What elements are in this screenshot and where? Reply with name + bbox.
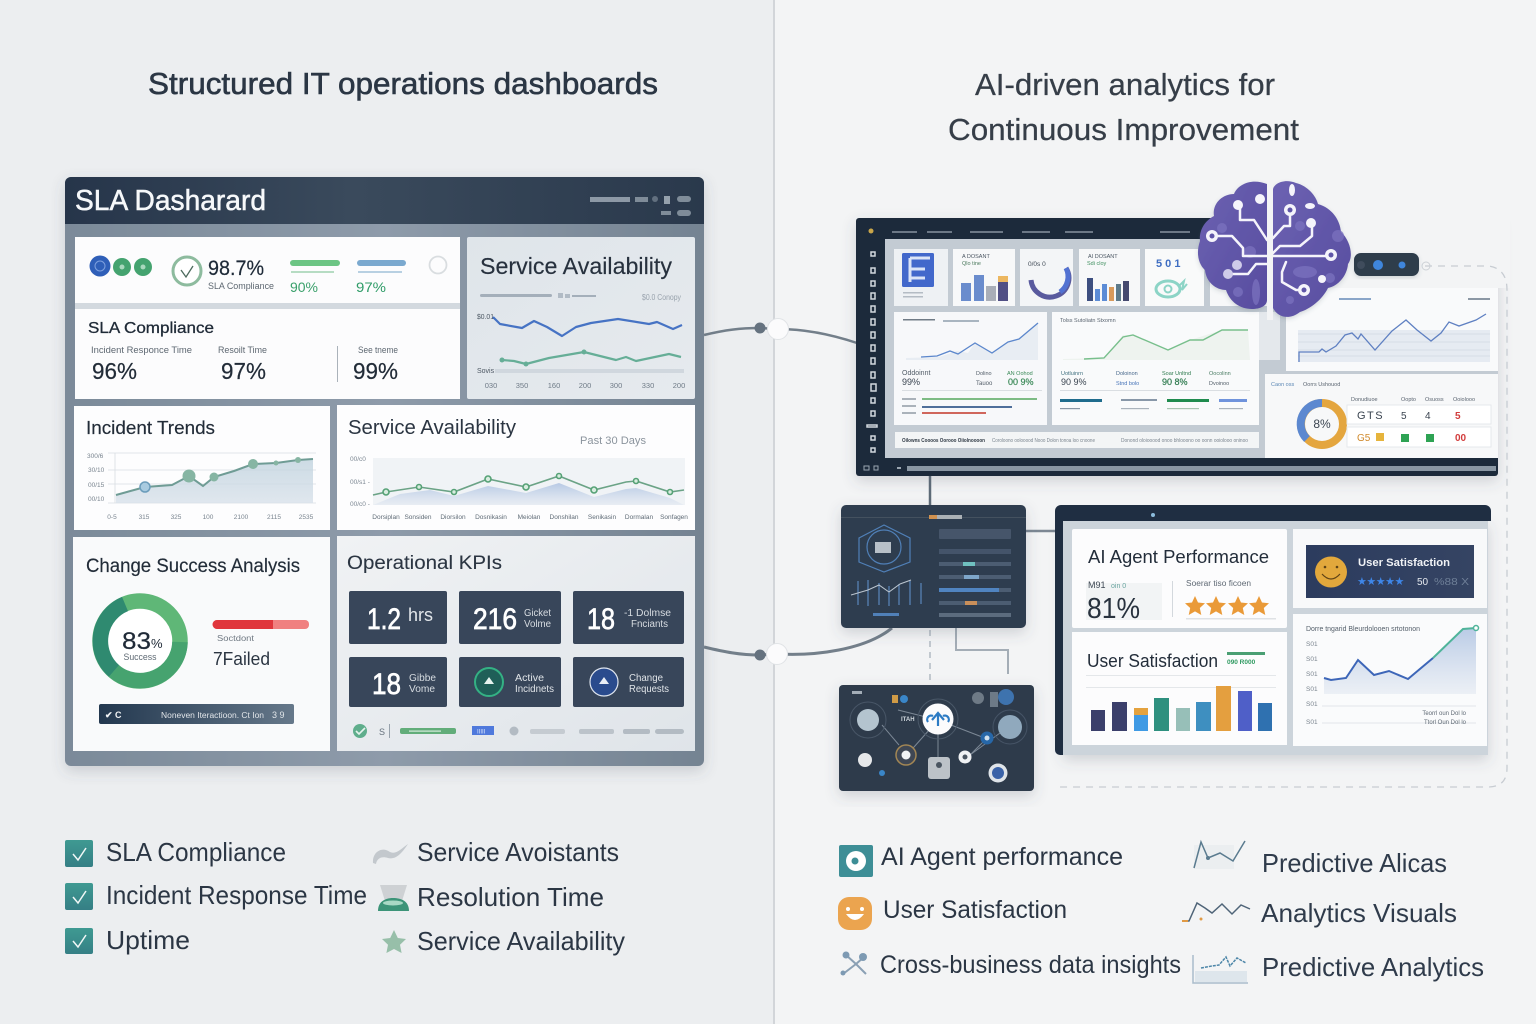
panel: SLA compliance: Resoilt Time xyxy=(218,345,267,356)
panel: incident trends: 315 xyxy=(139,514,150,521)
monitor top bar xyxy=(868,228,1190,234)
connector: monitor to small panel xyxy=(929,476,931,508)
panel: main AI monitor xyxy=(856,205,1510,476)
icon: AI pill indicator xyxy=(1354,253,1430,276)
panel: incident trends: 325 xyxy=(171,514,182,521)
card: lower right donut and table: Osuoss xyxy=(1425,397,1444,403)
card: teal gauge xyxy=(1145,249,1204,306)
panel: operational KPIs xyxy=(337,536,695,751)
card: logo xyxy=(894,249,948,306)
card: lower right donut and table: 00 xyxy=(1455,433,1467,444)
panel: service availability chart: 200 xyxy=(673,381,685,390)
panel: change success analysis: Change Success Analysis xyxy=(86,556,300,577)
card: lower right donut and table: Caon oss xyxy=(1271,382,1294,388)
KPI tile: hours: 1.2 xyxy=(367,603,401,636)
card: green line chart xyxy=(1052,312,1259,425)
panel: SLA compliance: 96% xyxy=(92,358,137,384)
panel: service availability chart: 030 xyxy=(485,381,497,390)
KPI tile: active incidents xyxy=(459,657,561,707)
KPI tile: incidents xyxy=(573,591,684,644)
panel: service availability past 30 days xyxy=(337,405,695,530)
panel: service availability chart: Sovis xyxy=(477,368,495,375)
title: left: Structured IT operations dashboards xyxy=(148,66,658,101)
KPI tile: global volume: 18 xyxy=(372,668,401,701)
KPI tile: hours xyxy=(349,591,447,644)
card: gauge: 0/0s 0 xyxy=(1028,261,1046,268)
card: AI agent performance xyxy=(1072,529,1287,628)
panel: change success analysis: 3 9 xyxy=(272,710,285,720)
monitor corner cut behind brain xyxy=(1275,205,1510,288)
panel: service availability chart: 300 xyxy=(610,381,622,390)
background: left half xyxy=(0,0,774,1024)
panel: service availability chart: $0.01 xyxy=(477,314,494,321)
star rating xyxy=(1185,596,1269,615)
card: blue line chart xyxy=(894,312,1047,425)
panel: service availability chart: 160 xyxy=(548,381,560,390)
KPI tile: ticket volume: Volme xyxy=(524,619,551,630)
panel: change success analysis: Noneven Iteractioon. Ct Ion xyxy=(161,711,264,720)
card: user satisfaction banner: %88 X xyxy=(1434,577,1469,588)
panel: service availability past 30 days: Senikasin xyxy=(588,514,616,521)
card: bar chart 2: AI DOSANT xyxy=(1088,254,1118,260)
card: lower right donut and table: Oorrs Ushouod xyxy=(1303,382,1340,388)
panel: SLA summary xyxy=(75,237,460,309)
KPI tile: global volume: Vome xyxy=(409,684,435,695)
panel: SLA compliance xyxy=(75,309,460,399)
KPI tile: ticket volume xyxy=(459,591,561,644)
icon: smiley xyxy=(1315,556,1347,588)
card: gauge xyxy=(1020,249,1073,306)
panel: change success analysis: 7Failed xyxy=(213,649,270,669)
connector: dashed vertical xyxy=(929,630,931,684)
KPI tile: incidents: Fnciants xyxy=(631,619,668,630)
card: green line chart: Dvoinoo xyxy=(1209,381,1229,387)
panel: service availability chart: 330 xyxy=(642,381,654,390)
card: trend chart: S01 xyxy=(1306,719,1318,726)
card: teal gauge: 5 0 1 xyxy=(1156,258,1180,270)
card: AI agent performance: Soerar tiso ficoen xyxy=(1186,579,1251,588)
title: right xyxy=(948,67,1299,147)
card: lower right donut and table: 5 xyxy=(1401,411,1407,422)
panel: service availability past 30 days: Dosnikasin xyxy=(475,514,507,521)
card: user satisfaction banner: User Satisfaction xyxy=(1358,557,1450,569)
panel: SLA compliance: 97% xyxy=(221,358,266,384)
card: blue line chart: 00 9% xyxy=(1008,377,1034,387)
monitor content background xyxy=(885,239,1498,458)
card: green line chart: Soar Unltnd xyxy=(1162,371,1191,377)
card: trend chart xyxy=(1293,614,1487,746)
panel: small dark analytics panel xyxy=(841,505,1026,628)
card: behind brain lower xyxy=(1259,312,1280,360)
legend item: resolution time: Resolution Time xyxy=(417,882,604,912)
legend: left checklist xyxy=(65,837,625,956)
card: trend chart: Dorre tngarid Bleurdolooen srtotonon xyxy=(1306,624,1420,633)
panel: service availability past 30 days: Sonfagen xyxy=(660,514,688,521)
card: lower right donut and table: Ooiolooo xyxy=(1453,397,1475,403)
card: bar chart 1 xyxy=(953,249,1015,306)
panel: service availability past 30 days: Dormalan xyxy=(625,514,653,521)
card: text strip: Coroloono oolooood Nooo Dolon tonoa loo cnoone xyxy=(992,438,1095,444)
donut: 8%: 8% xyxy=(1313,417,1331,431)
KPI tile: incidents: -1 Dolmse xyxy=(624,608,671,619)
panel: SLA compliance: Incident Responce Time xyxy=(91,345,192,356)
card: green line chart: Stnd bolo xyxy=(1116,381,1139,387)
KPI tile: incidents: 18 xyxy=(587,603,615,636)
card: green line chart: 90 8% xyxy=(1162,377,1188,387)
panel: incident trends: 00/15 xyxy=(88,482,105,489)
panel: SLA summary: 90% xyxy=(290,279,318,295)
panel: SLA compliance: See tneme xyxy=(358,345,398,356)
card: behind brain xyxy=(1210,249,1270,306)
dashboard header: SLA Dasharard xyxy=(75,185,266,217)
card: lower right donut and table: GTS xyxy=(1357,410,1384,422)
dashed outline around right cluster xyxy=(1060,266,1507,787)
panel: change success analysis: ✔ C xyxy=(105,710,122,720)
panel: incident trends: 0-5 xyxy=(107,514,117,521)
panel: service availability past 30 days: Donshilan xyxy=(550,514,579,521)
panel: service availability chart: 350 xyxy=(516,381,528,390)
connector: upper xyxy=(704,318,857,343)
KPI tile: change requests: Requests xyxy=(629,684,669,695)
donut: 8% xyxy=(1301,403,1343,445)
dashboard header xyxy=(65,177,704,224)
card: trend chart: S01 xyxy=(1306,671,1318,678)
check item: uptime xyxy=(65,925,190,955)
card: trend chart: S01 xyxy=(1306,641,1318,648)
donut chart: Success xyxy=(124,652,157,662)
icon: AI brain xyxy=(1198,180,1351,320)
panel: incident trends: Incident Trends xyxy=(86,418,215,438)
panel: small dark network panel: ITAH xyxy=(901,717,915,723)
card: text strip xyxy=(895,432,1259,448)
legend: right feature list xyxy=(838,841,1484,983)
card: blue line chart: Dolino xyxy=(976,371,992,377)
card: bar chart 2 xyxy=(1079,249,1140,306)
panel: incident trends: 300/6 xyxy=(87,453,104,460)
card: lower right donut and table: G5 xyxy=(1357,433,1371,444)
legend item: user satisfaction xyxy=(838,896,1067,930)
panel: service availability chart: 200 xyxy=(579,381,591,390)
card: green line chart: Tolss Sutoliatn Stxomn xyxy=(1060,318,1116,324)
panel: SLA summary: SLA Compliance xyxy=(208,281,274,291)
card: trend chart: S01 xyxy=(1306,656,1318,663)
panel: incident trends: 2535 xyxy=(299,514,314,521)
KPI tile: global volume: Gibbe xyxy=(409,673,436,684)
panel: service availability past 30 days: Meiolan xyxy=(518,514,541,521)
card: user satisfaction banner xyxy=(1293,529,1487,608)
card: lower right donut and table xyxy=(1265,374,1498,458)
panel: SLA dashboard xyxy=(65,177,704,766)
mini data rows xyxy=(939,529,1011,617)
card: text strip: Oilowns Coooos Oorooo Oiiolnoooon xyxy=(902,438,986,444)
panel: tablet dashboard xyxy=(1055,505,1491,755)
panel: small dark network panel xyxy=(839,685,1034,791)
card: user satisfaction banner: 50 xyxy=(1417,577,1429,588)
panel: service availability past 30 days: Past 30 Days xyxy=(580,435,647,447)
connector: elbow xyxy=(956,628,1008,674)
panel: service availability past 30 days: Dorsiplan xyxy=(372,514,400,521)
background: right half xyxy=(774,0,1536,1024)
panel: SLA compliance: 99% xyxy=(353,358,398,384)
card: green line chart: Oocolinn xyxy=(1209,371,1231,377)
card: trend chart: S01 xyxy=(1306,686,1318,693)
card: blue line chart: AN Oohod xyxy=(1007,371,1033,377)
card: blue line chart: 99% xyxy=(902,377,920,387)
card: AI agent performance: M91 xyxy=(1088,580,1106,590)
legend item: cross-business data insights: Cross-business data insights xyxy=(880,951,1181,979)
donut chart: 83 xyxy=(122,628,151,655)
card: bar chart 1: A DOSANT xyxy=(962,254,990,260)
panel: incident trends xyxy=(74,406,330,530)
monitor sidebar icons xyxy=(867,252,877,452)
panel: incident trends: 30/10 xyxy=(88,467,105,474)
panel: incident trends: 100 xyxy=(203,514,214,521)
card: user satisfaction bars: 090 R000 xyxy=(1227,659,1256,666)
central divider xyxy=(773,0,775,1024)
card: lower right donut and table: Oopto xyxy=(1401,397,1416,403)
KPI tile: ticket volume: 216 xyxy=(473,603,517,636)
monitor bottom bar xyxy=(864,466,1496,471)
KPI tile: global volume xyxy=(349,657,447,707)
card: green line chart: Uotluinrn xyxy=(1061,371,1083,377)
KPI tile: ticket volume: Gicket xyxy=(524,608,551,619)
card: trend chart: S01 xyxy=(1306,701,1318,708)
legend item: service avoistants: Service Avoistants xyxy=(417,837,619,867)
panel: service availability chart: $0.0 Conopy xyxy=(642,293,681,302)
bar chart xyxy=(1091,686,1272,731)
panel: service availability past 30 days: 00/c0 - xyxy=(350,501,370,508)
check item: SLA compliance: SLA Compliance xyxy=(106,837,286,867)
check item: incident response time: Incident Response Time xyxy=(106,880,367,910)
panel: service availability past 30 days: 00/s1 - xyxy=(350,479,370,486)
card: upper right line chart xyxy=(1286,288,1498,371)
panel: service availability past 30 days: Diorsilon xyxy=(440,514,466,521)
legend item: service availability: Service Availability xyxy=(417,926,625,956)
KPI tile: active incidents: Incidnets xyxy=(515,684,554,695)
panel: change success analysis: Soctdont xyxy=(217,634,255,643)
KPI tile: change requests xyxy=(573,657,684,707)
KPI footer status row xyxy=(353,724,684,738)
panel: service availability past 30 days: 00/c0 xyxy=(350,456,366,463)
connector: lower xyxy=(704,628,892,664)
card: user satisfaction banner: ★★★★★ xyxy=(1357,576,1404,588)
connector: small panel to tablet xyxy=(1026,530,1056,532)
title: right: AI-driven analytics for xyxy=(975,67,1275,102)
panel: SLA compliance: SLA Compliance xyxy=(88,320,214,337)
dashboard frame xyxy=(65,177,704,766)
KPI footer status row: S xyxy=(379,727,385,737)
KPI tile: change requests: Change xyxy=(629,673,663,684)
donut chart: % xyxy=(151,636,163,651)
panel: service availability past 30 days: Sonsiden xyxy=(404,514,432,521)
panel: incident trends: 00/10 xyxy=(88,496,105,503)
card: bar chart 1: Qlo tine xyxy=(962,261,981,267)
card: bar chart 2: Sdi cloy xyxy=(1087,261,1107,267)
legend item: predictive alicas: Predictive Alicas xyxy=(1262,848,1447,878)
card: AI agent performance: oin 0 xyxy=(1111,583,1126,590)
card: AI agent performance: 81% xyxy=(1087,593,1140,625)
panel: SLA summary: 97% xyxy=(356,279,386,295)
card: lower right donut and table: 5 xyxy=(1455,411,1461,422)
card: user satisfaction bars: User Satisfaction xyxy=(1087,651,1218,671)
KPI tile: hours: hrs xyxy=(408,605,433,625)
donut chart xyxy=(100,601,180,681)
legend item: analytics visuals: Analytics Visuals xyxy=(1261,898,1457,928)
card: user satisfaction bars xyxy=(1072,632,1287,745)
card: lower right donut and table: Donudiuoe xyxy=(1351,397,1378,403)
panel: change success analysis xyxy=(73,537,330,751)
panel: service availability chart xyxy=(467,237,695,399)
card: blue line chart: Tauoo xyxy=(976,381,993,387)
panel: service availability past 30 days: Service Availability xyxy=(348,417,516,439)
mini waveform chart xyxy=(851,580,921,616)
panel: service availability chart: Service Availability xyxy=(480,253,672,279)
KPI footer status row: IIIII xyxy=(477,730,486,736)
card: text strip: Donond oloiooood onoo bhlooono oo oonn ooiolooo oninoo xyxy=(1121,438,1248,444)
card: AI agent performance: AI Agent Performance xyxy=(1088,547,1269,567)
panel: SLA summary: 98.7% xyxy=(208,257,264,280)
card: green line chart: 90 9% xyxy=(1061,377,1087,387)
title: right: Continuous Improvement xyxy=(948,112,1299,147)
hexagon icon xyxy=(859,525,910,572)
card: blue line chart: Oddoinnt xyxy=(902,370,930,377)
legend item: user satisfaction: User Satisfaction xyxy=(883,896,1067,924)
card: trend chart: Teorrl oun Dol lo xyxy=(1422,711,1467,717)
legend item: predictive analytics: Predictive Analytics xyxy=(1262,952,1484,982)
panel: operational KPIs: Operational KPIs xyxy=(347,553,502,574)
panel: incident trends: 2115 xyxy=(267,514,281,521)
KPI tile: active incidents: Active xyxy=(515,673,544,684)
legend item: AI agent performance: AI Agent performance xyxy=(881,843,1123,871)
legend item: predictive alicas xyxy=(1194,841,1447,878)
card: lower right donut and table: 4 xyxy=(1425,411,1431,422)
card: trend chart: Ttorl Oun Dol lo xyxy=(1424,720,1467,726)
panel: incident trends: 2100 xyxy=(234,514,249,521)
check item: uptime: Uptime xyxy=(106,925,190,955)
card: green line chart: Doloinon xyxy=(1116,371,1138,377)
